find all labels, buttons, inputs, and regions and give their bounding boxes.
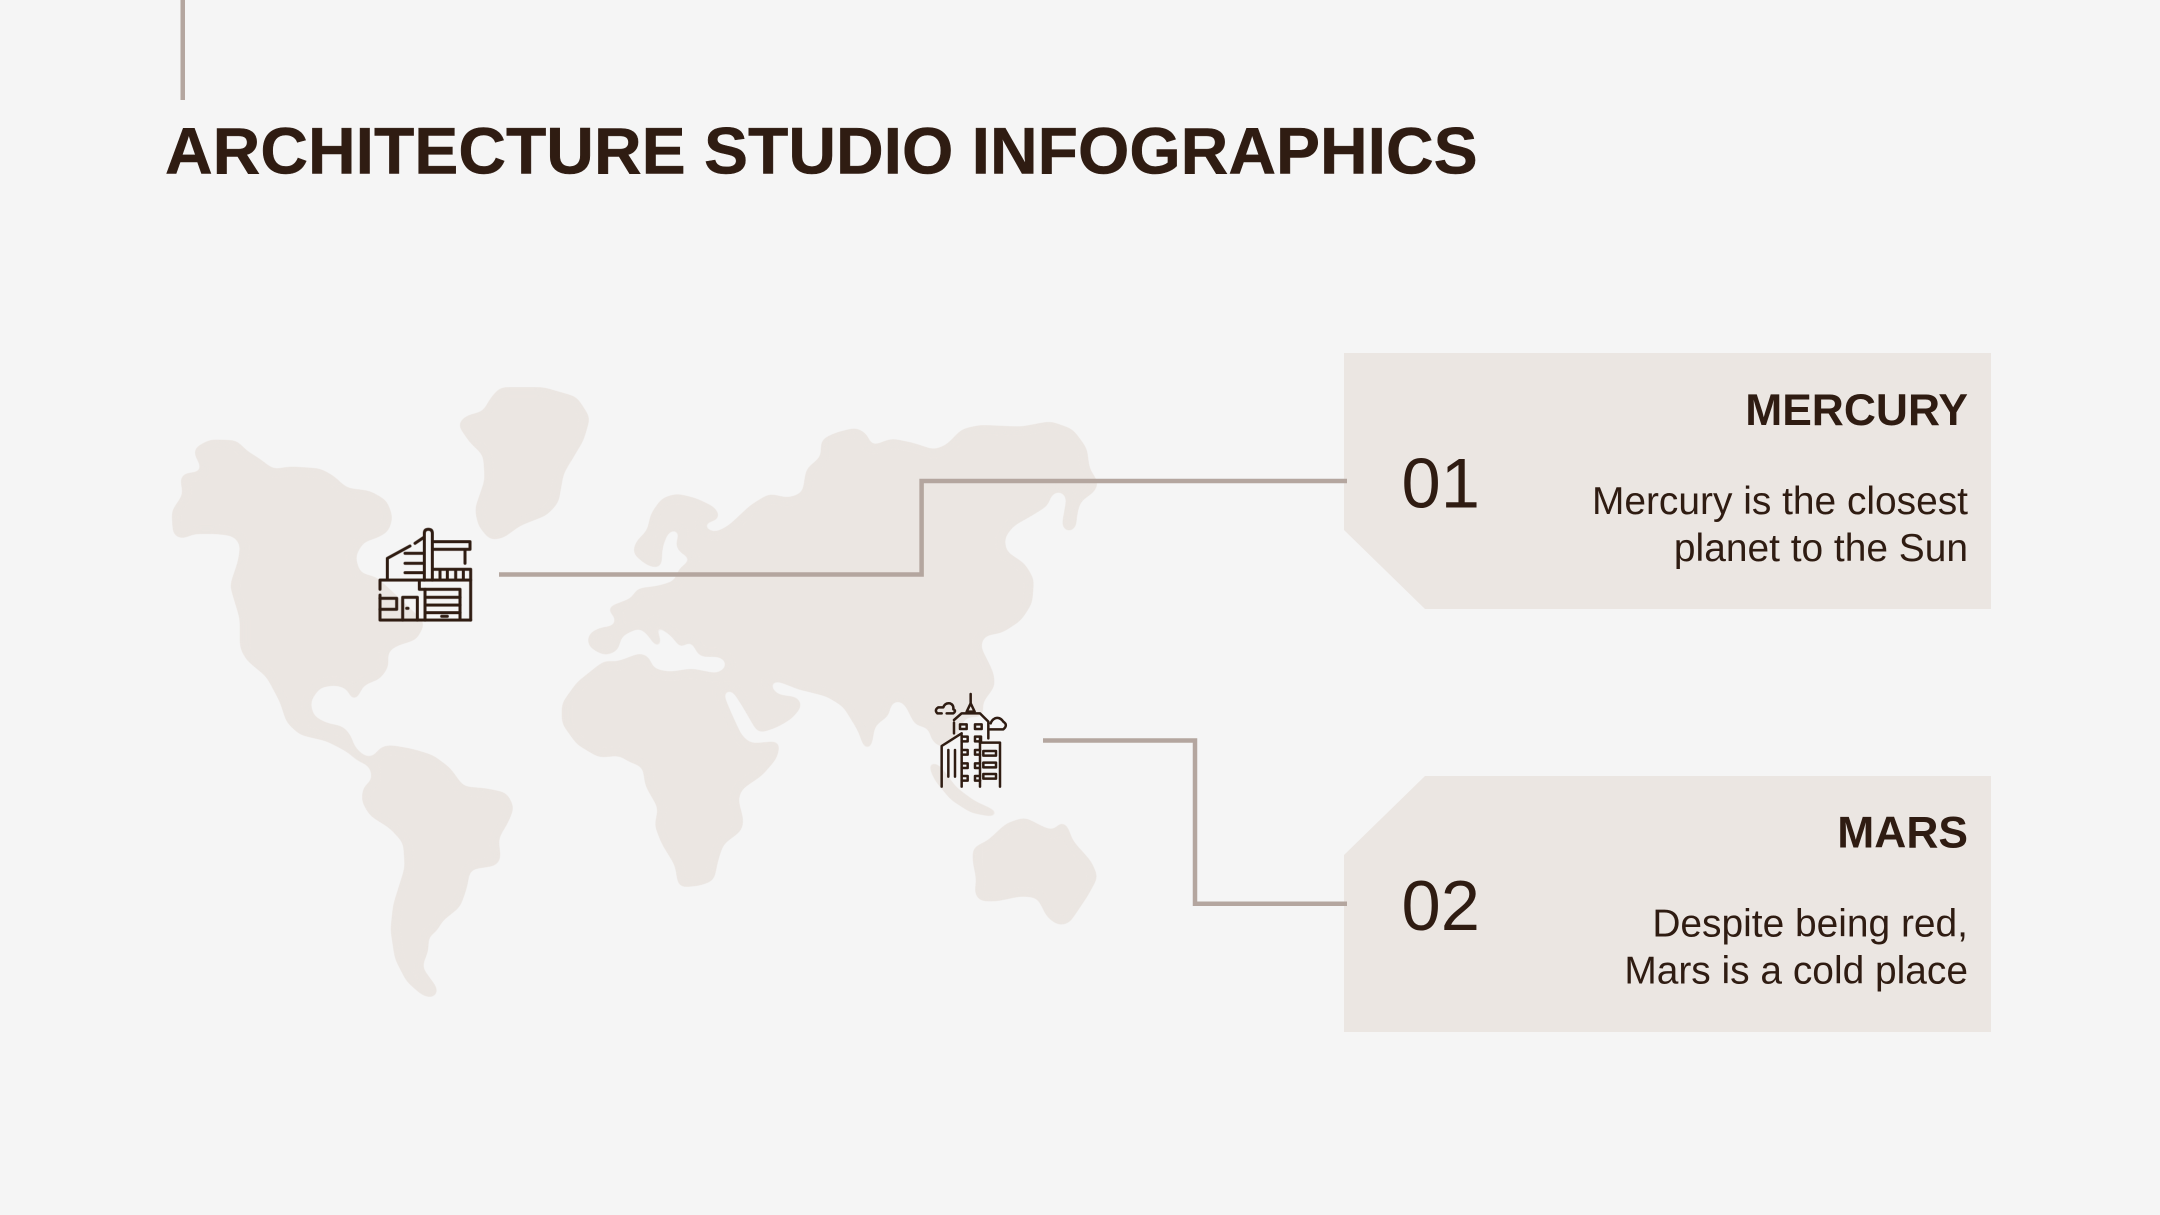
- accent line at top: [180, 0, 185, 100]
- icon: skyscrapers with clouds: [936, 694, 1006, 787]
- panel background: [1344, 353, 1991, 609]
- number 02: 02: [1402, 866, 1480, 945]
- panel background: [1344, 776, 1991, 1032]
- description: Mercury: planet to the Sun: [1674, 527, 1968, 570]
- panel: Mercury: [1344, 353, 1991, 609]
- panel: Mars: [1344, 776, 1991, 1032]
- connector line: building to Mercury: [499, 481, 1347, 574]
- world map: [172, 387, 1099, 998]
- connector line: skyscraper to Mars: [1043, 740, 1347, 904]
- title: ARCHITECTURE STUDIO INFOGRAPHICS: [165, 114, 1478, 188]
- australia: [973, 817, 1098, 925]
- description: Mercury: Mercury is the closest: [1592, 480, 1968, 523]
- number 01: 01: [1402, 444, 1480, 522]
- icon: modern house: [380, 529, 471, 620]
- heading: Mercury: MERCURY: [1745, 386, 1968, 435]
- description: Mars: Despite being red,: [1652, 902, 1968, 946]
- description: Mars: Mars is a cold place: [1624, 950, 1968, 992]
- heading: Mars: MARS: [1837, 808, 1968, 858]
- sumatra strip: [927, 760, 1001, 817]
- americas and greenland: [172, 387, 590, 998]
- eurasia and africa: [562, 421, 1099, 887]
- greenland: [457, 387, 590, 540]
- eurasia, africa and australia: [562, 421, 1099, 925]
- north and south america: [172, 440, 514, 998]
